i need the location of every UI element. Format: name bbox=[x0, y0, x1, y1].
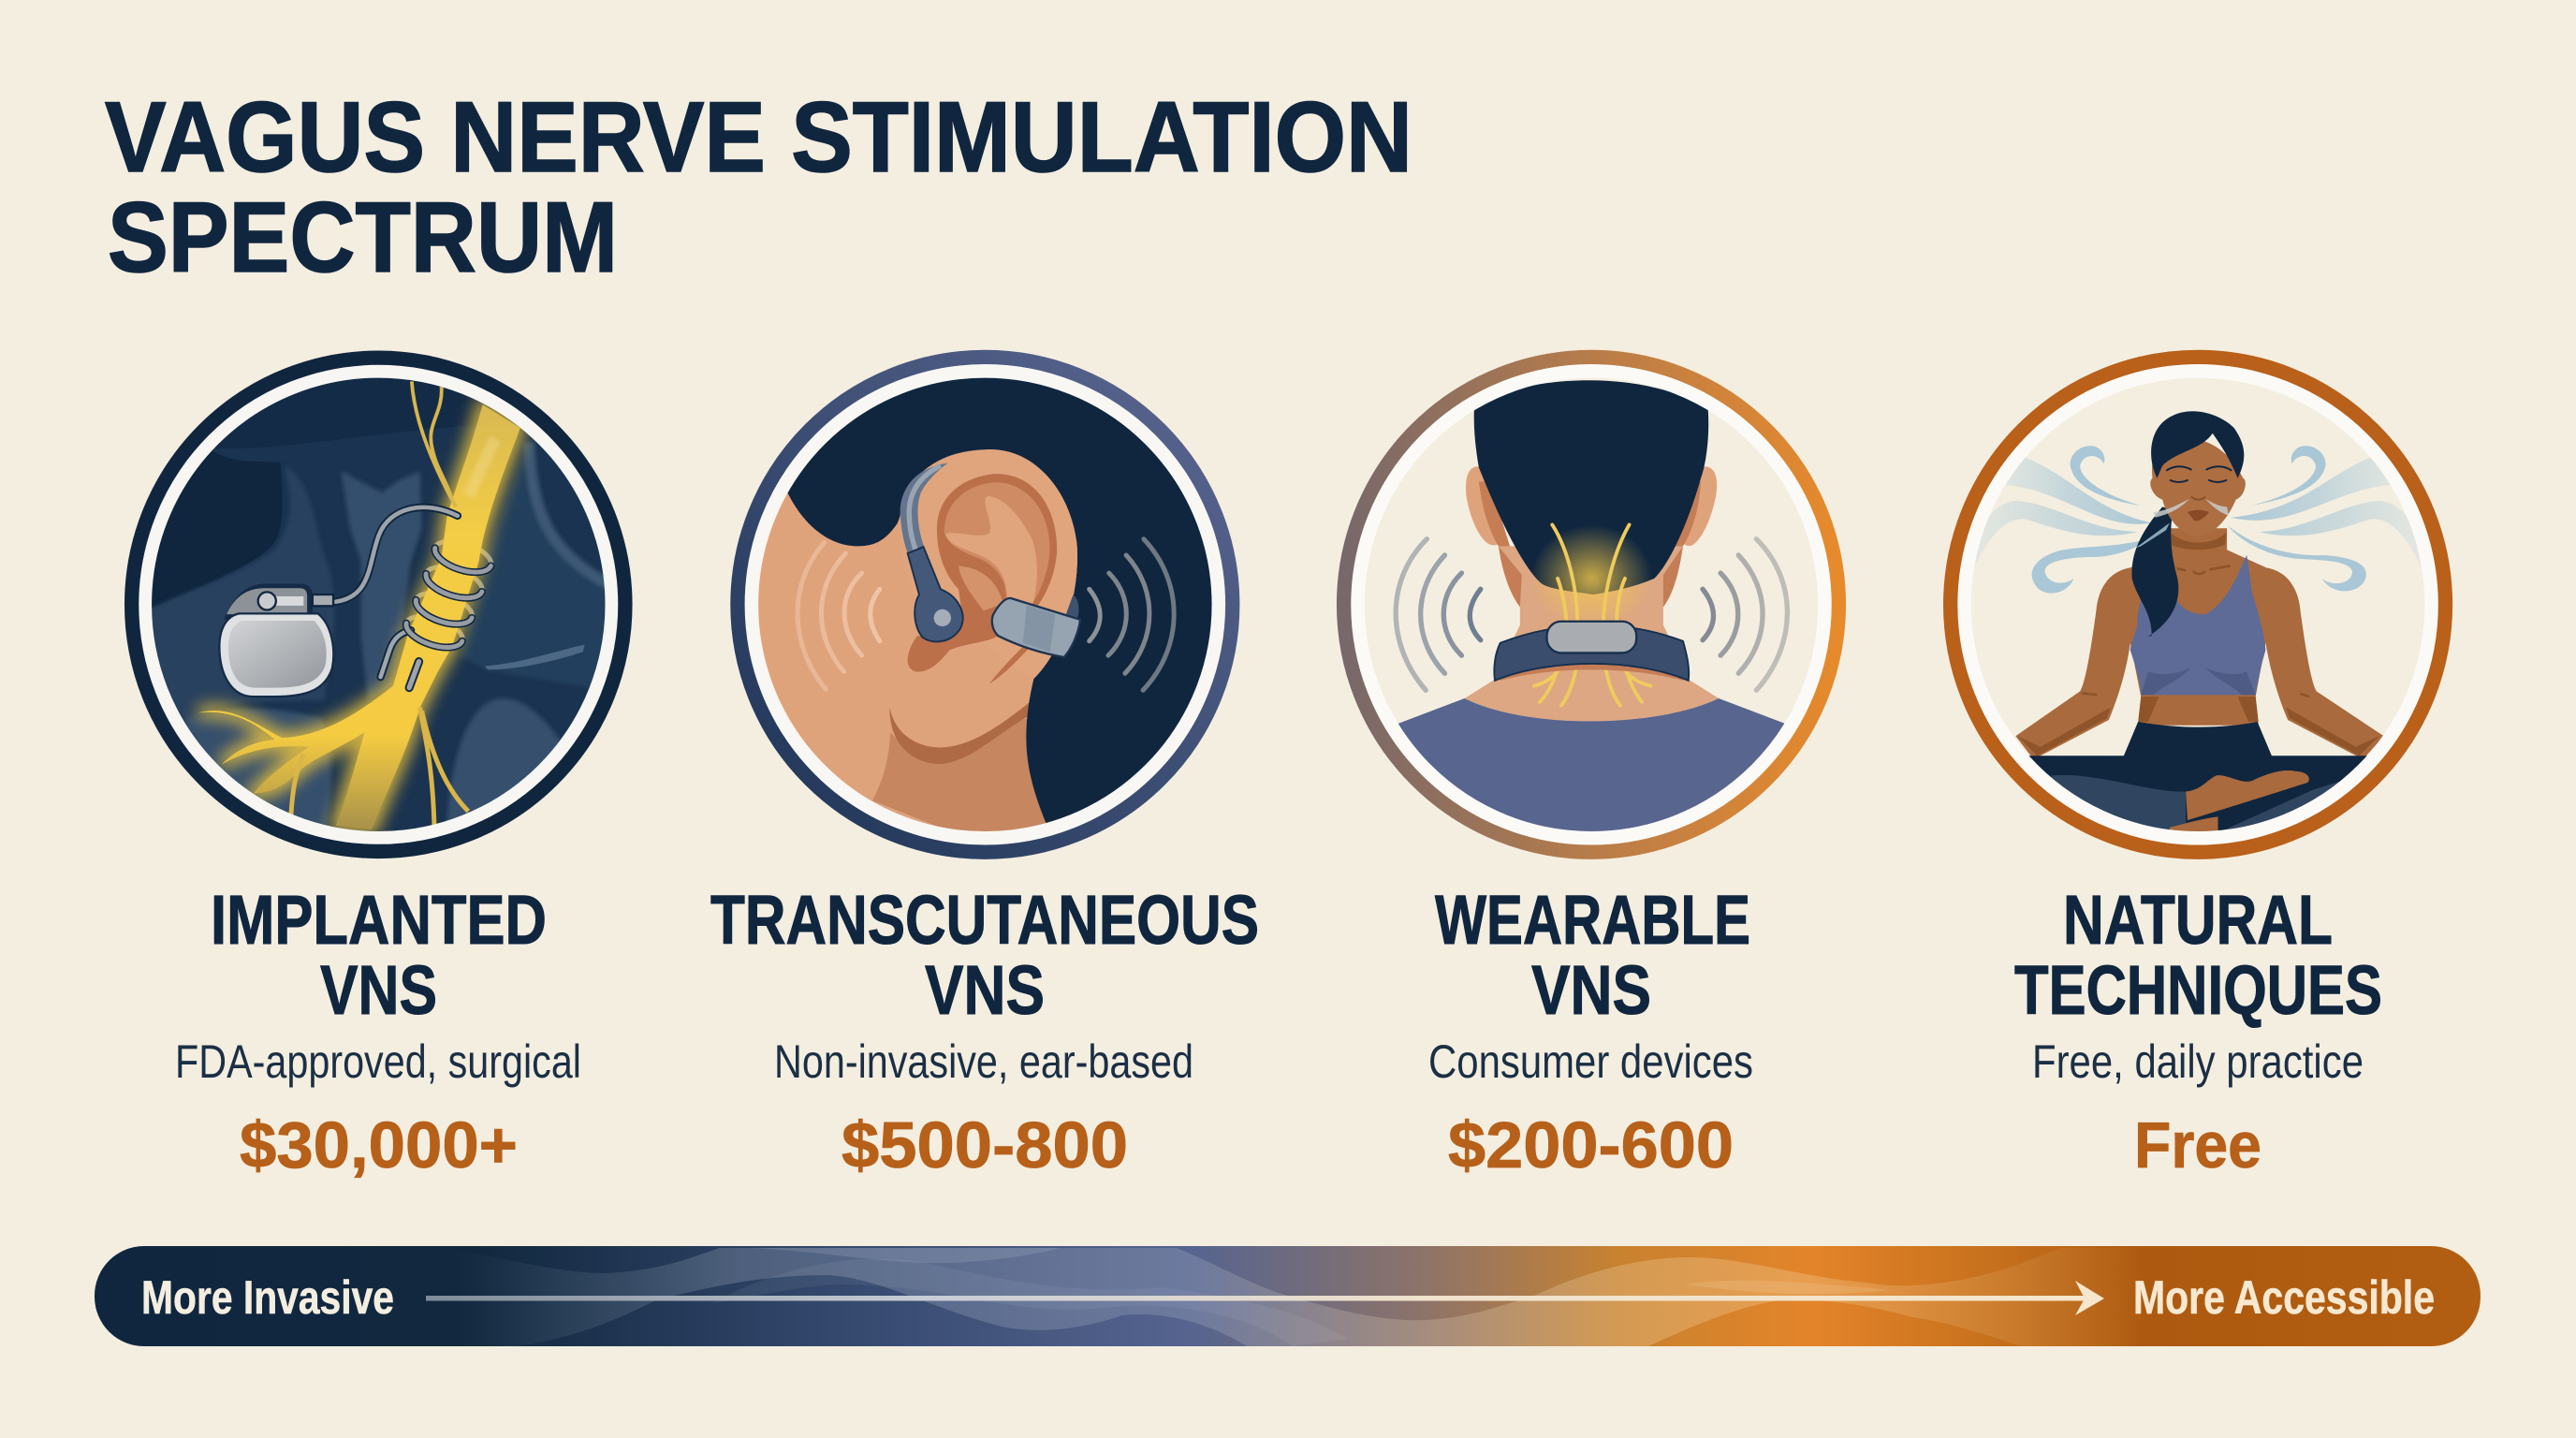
top bbox=[2130, 555, 2265, 695]
icon: breath swirls right bbox=[2227, 446, 2423, 591]
icon: ear clip device bbox=[992, 594, 1080, 657]
title: VAGUS NERVE STIMULATION bbox=[105, 81, 1412, 193]
column: implanted VNS text: $30,000+ bbox=[240, 1108, 518, 1181]
panel: natural techniques illustration bbox=[1951, 357, 2445, 852]
ponytail bbox=[2131, 506, 2178, 637]
head bbox=[2150, 442, 2246, 528]
column: transcutaneous VNS text bbox=[710, 881, 1259, 1181]
column: natural techniques text: Free, daily practice bbox=[2032, 1035, 2364, 1088]
title: SPECTRUM bbox=[108, 181, 618, 293]
column: natural techniques text: Free bbox=[2134, 1108, 2261, 1181]
icon: vibration waves left bbox=[1396, 539, 1481, 690]
icon: ear hook device bbox=[900, 463, 963, 641]
icon: nerve lines bbox=[1534, 524, 1651, 706]
figure body bbox=[2015, 528, 2384, 759]
icon: coil around nerve bbox=[406, 548, 490, 647]
column: wearable VNS text: Consumer devices bbox=[1428, 1035, 1753, 1088]
column: transcutaneous VNS text: Non-invasive, ear-based bbox=[774, 1035, 1193, 1088]
icon: implant lead wire bbox=[336, 507, 458, 688]
column: transcutaneous VNS text: VNS bbox=[925, 951, 1045, 1029]
leggings bbox=[2027, 722, 2370, 836]
ring bbox=[738, 357, 1233, 852]
icon: pulse generator bbox=[219, 584, 333, 697]
icon: vibration waves right bbox=[1090, 539, 1174, 690]
panel: transcutaneous VNS illustration bbox=[738, 357, 1233, 852]
ring bbox=[132, 358, 625, 851]
arrow bbox=[426, 1281, 2104, 1315]
column: wearable VNS text bbox=[1428, 881, 1753, 1181]
title bbox=[105, 81, 1412, 293]
column: implanted VNS text bbox=[175, 881, 581, 1181]
spectrum bar bbox=[95, 1246, 2481, 1346]
foot bbox=[2170, 770, 2309, 833]
column: transcutaneous VNS text: $500-800 bbox=[842, 1108, 1128, 1181]
column: wearable VNS text: WEARABLE bbox=[1435, 881, 1750, 959]
ring bbox=[1951, 357, 2445, 852]
column: natural techniques text: TECHNIQUES bbox=[2014, 951, 2382, 1029]
column: natural techniques text: NATURAL bbox=[2063, 881, 2333, 959]
panel: wearable VNS illustration bbox=[1344, 357, 1838, 865]
ring bbox=[1344, 357, 1838, 852]
icon: vibration waves right bbox=[1703, 539, 1787, 690]
breath at nose bbox=[2154, 499, 2229, 518]
column: natural techniques text bbox=[2014, 881, 2382, 1181]
label: more accessible: More Accessible bbox=[2133, 1271, 2435, 1324]
column: transcutaneous VNS text: TRANSCUTANEOUS bbox=[710, 881, 1259, 959]
column: wearable VNS text: $200-600 bbox=[1448, 1108, 1734, 1181]
column: implanted VNS text: VNS bbox=[320, 951, 437, 1029]
icon: breath swirls left bbox=[1972, 446, 2152, 594]
panel: implanted VNS illustration bbox=[132, 358, 625, 851]
column: wearable VNS text: VNS bbox=[1531, 951, 1651, 1029]
column: implanted VNS text: IMPLANTED bbox=[211, 881, 547, 959]
label: more invasive: More Invasive bbox=[141, 1271, 394, 1324]
column: implanted VNS text: FDA-approved, surgical bbox=[175, 1035, 581, 1088]
icon: neck collar device bbox=[1494, 622, 1689, 681]
